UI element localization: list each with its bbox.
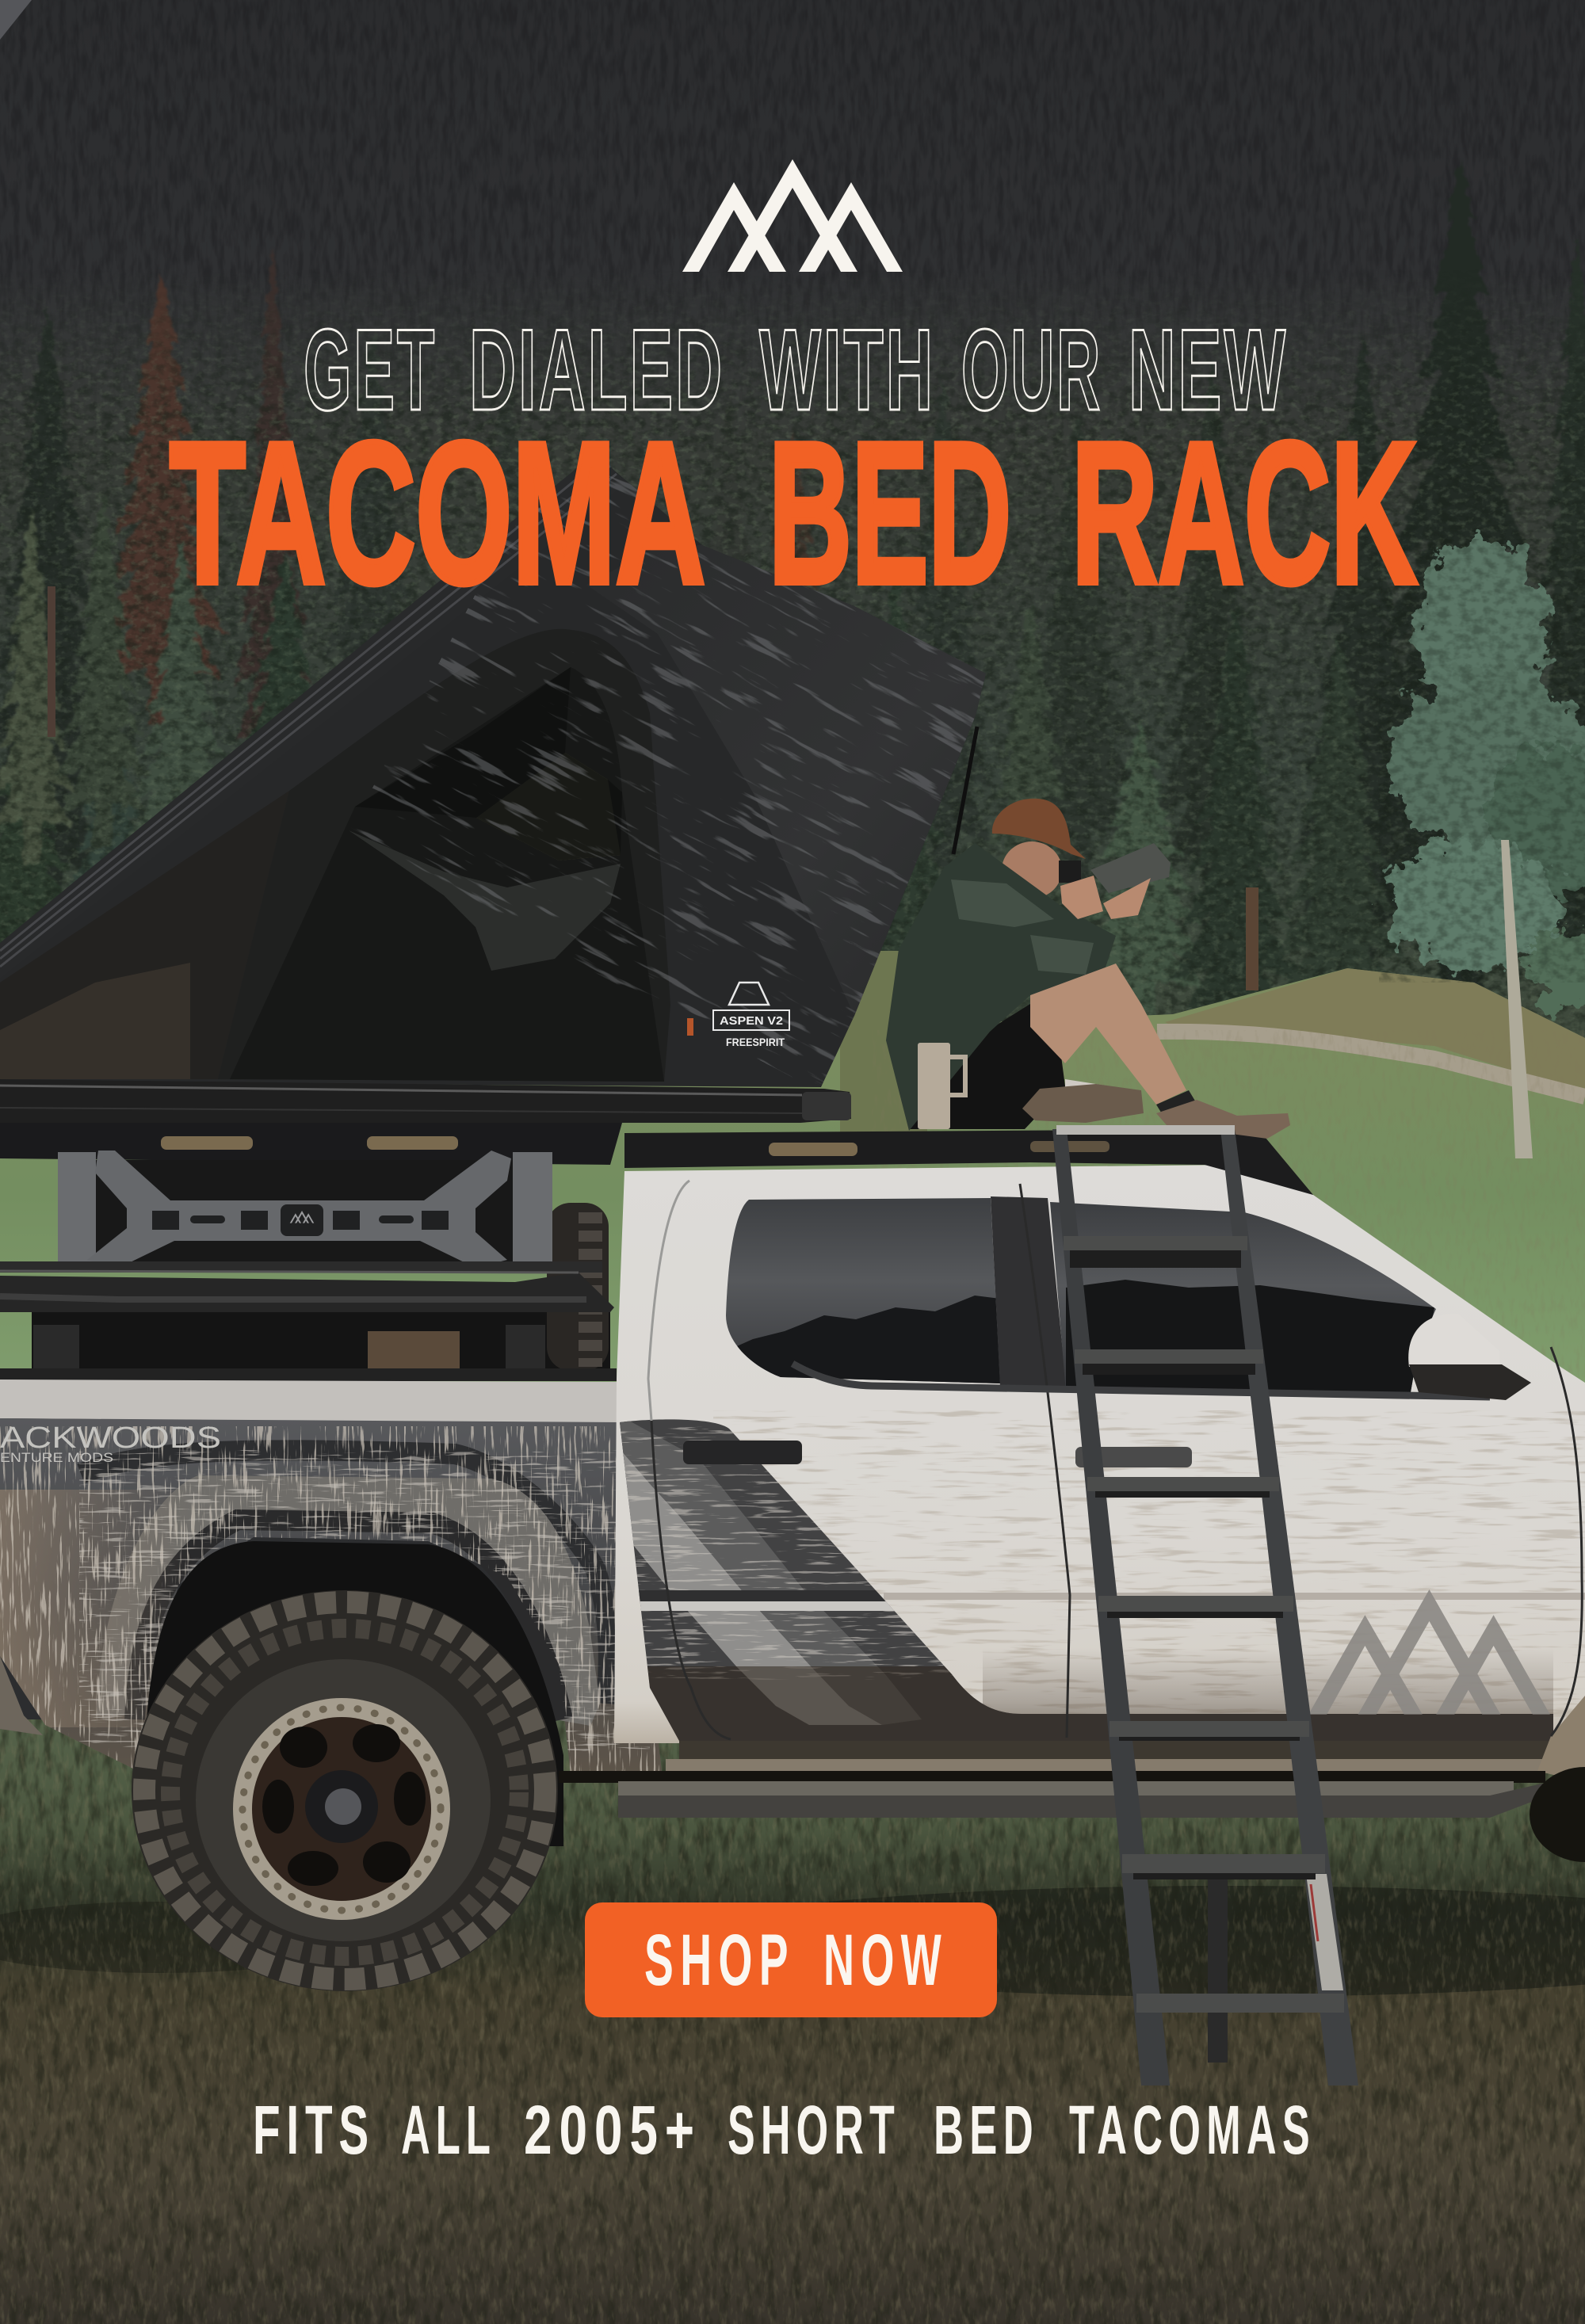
fitment note: TACOMAS [1069, 2092, 1316, 2169]
light band [610, 1438, 882, 1725]
truck bed and rack [0, 1123, 682, 1846]
left rail [1052, 1129, 1170, 2085]
heading: get dialed with our new: GET [304, 305, 437, 434]
background: aspen tree [1379, 539, 1585, 1158]
wheel well [147, 1541, 563, 1846]
sock [1156, 1090, 1198, 1119]
aspen trunk [1501, 840, 1533, 1158]
right fly panel [586, 545, 986, 1016]
bed white band [0, 1380, 620, 1423]
beadlock bolts [243, 1708, 441, 1910]
front door glass [1046, 1196, 1442, 1395]
door pillar [991, 1196, 1067, 1391]
sidewall [196, 1659, 491, 1941]
door paint streaks [713, 1410, 1585, 1719]
rung shadows [1070, 1250, 1316, 1879]
tent ridge [0, 452, 626, 979]
heading: get dialed with our new: DIALED [469, 305, 724, 434]
bed side panel [0, 1418, 662, 1775]
background: conifer forest [0, 158, 1585, 1109]
roof rack [624, 1129, 1313, 1195]
aspen v2 label: ASPEN V2 [720, 1014, 783, 1028]
heading: tacoma bed rack [170, 400, 1417, 625]
telescoping ladder [1052, 1125, 1358, 2085]
aspen v2 label [713, 983, 789, 1048]
heading: get dialed with our new: OUR [961, 305, 1102, 434]
lower rack rails [0, 1261, 614, 1312]
heading: get dialed with our new: NEW [1129, 305, 1288, 434]
front wheel edge [1530, 1767, 1585, 1862]
fitment note: 2005+ [524, 2092, 701, 2169]
rooftop tent [0, 465, 986, 1123]
rear rack frame backing [32, 1160, 610, 1370]
front door handle [1075, 1447, 1192, 1467]
hub cap [325, 1788, 361, 1825]
shop now button [585, 1902, 997, 2017]
hub [305, 1770, 378, 1843]
spare tire behind rack [547, 1203, 609, 1371]
fabric wrinkles [357, 475, 984, 1084]
door seams [648, 1181, 1582, 1739]
background: dark mountainside [0, 0, 1585, 792]
mesh door [230, 667, 664, 1082]
jacket [886, 843, 1116, 1131]
medium band [610, 1410, 922, 1725]
bed top rail [0, 1368, 617, 1381]
right rail [1220, 1129, 1358, 2085]
rear wheel [132, 1590, 558, 1991]
brown mesh patch [0, 963, 190, 1079]
top rung [1056, 1125, 1235, 1135]
rungs [1064, 1236, 1344, 2013]
tent pole [953, 727, 977, 854]
fitment note [253, 2092, 1316, 2169]
rocker panels [666, 1696, 1585, 1783]
light rail section [1306, 1874, 1343, 1990]
fender flare [97, 1475, 600, 1726]
reflection bands [610, 1590, 1006, 1601]
tread inner lugs [170, 1628, 519, 1956]
red stripe [1311, 1884, 1318, 1941]
left mesh panel [0, 791, 289, 1079]
molle plate [58, 1151, 552, 1268]
heading: get dialed with our new: WITH [759, 305, 935, 434]
rim [233, 1698, 450, 1920]
door logo decal [1308, 1589, 1550, 1715]
fitment note: FITS [253, 2092, 375, 2169]
rear door glass [713, 1189, 1014, 1395]
rolled flap [349, 830, 621, 971]
wheel openings [262, 1724, 426, 1886]
background: meadow and trail [0, 951, 1585, 1418]
logo [682, 159, 903, 272]
mud splatter on bed [0, 1426, 682, 1791]
rear door handle [683, 1441, 802, 1464]
door graphic stripe [610, 1410, 1561, 1751]
side step [618, 1781, 1585, 1818]
center post [1208, 1876, 1228, 2063]
camera body [1059, 861, 1081, 883]
rack beam over bed [0, 1123, 622, 1165]
fitment note: BED [934, 2092, 1039, 2169]
shop now button: SHOP [644, 1920, 795, 2001]
door body crease [884, 1593, 1585, 1600]
head [1002, 841, 1062, 899]
shop now button: NOW [823, 1920, 948, 2001]
dark upper door [355, 667, 622, 861]
window belt line [792, 1364, 1490, 1397]
scratches [618, 1426, 983, 1680]
leg [1030, 964, 1186, 1105]
tent body [0, 456, 986, 1087]
tailgate branding: ENTURE MODS [0, 1450, 113, 1465]
spotting scope [1090, 843, 1171, 893]
shorts [909, 1004, 1065, 1129]
aspen v2 label: FREESPIRIT [726, 1036, 785, 1048]
cab body [559, 1165, 1585, 1818]
hands [1060, 876, 1151, 919]
raised boot sole [1022, 1084, 1144, 1123]
knee highlight [1065, 1079, 1136, 1103]
mesh arch [218, 629, 670, 1082]
tailgate branding [0, 1421, 221, 1465]
orange tag [687, 1018, 693, 1036]
side mirror [1408, 1314, 1531, 1400]
rear bumper [0, 1656, 43, 1735]
cap [992, 799, 1086, 859]
body crease dark strip [81, 1450, 609, 1704]
window [476, 753, 621, 861]
bottle [918, 1043, 965, 1129]
fitment note: SHORT [728, 2092, 900, 2169]
person on roof [886, 799, 1290, 1139]
jacket highlights [951, 880, 1094, 975]
boot [1156, 1100, 1290, 1139]
heading: get dialed with our new [304, 305, 1288, 434]
tent base shell [0, 1079, 851, 1123]
heading: tacoma bed rack: TACOMA [170, 400, 705, 625]
flare inner shadow [135, 1520, 563, 1719]
wheel face [252, 1717, 431, 1901]
tire [132, 1590, 558, 1991]
tread outer lugs [144, 1602, 545, 1979]
fitment note: ALL [401, 2092, 496, 2169]
heading: tacoma bed rack: BED [769, 400, 1011, 625]
lower door mud [983, 1648, 1553, 1718]
foreground: grass and dirt [0, 1719, 1585, 2324]
under body [559, 1771, 1545, 1783]
bottom mud [610, 1666, 1561, 1746]
tailgate branding: ACKWOODS [0, 1421, 221, 1455]
